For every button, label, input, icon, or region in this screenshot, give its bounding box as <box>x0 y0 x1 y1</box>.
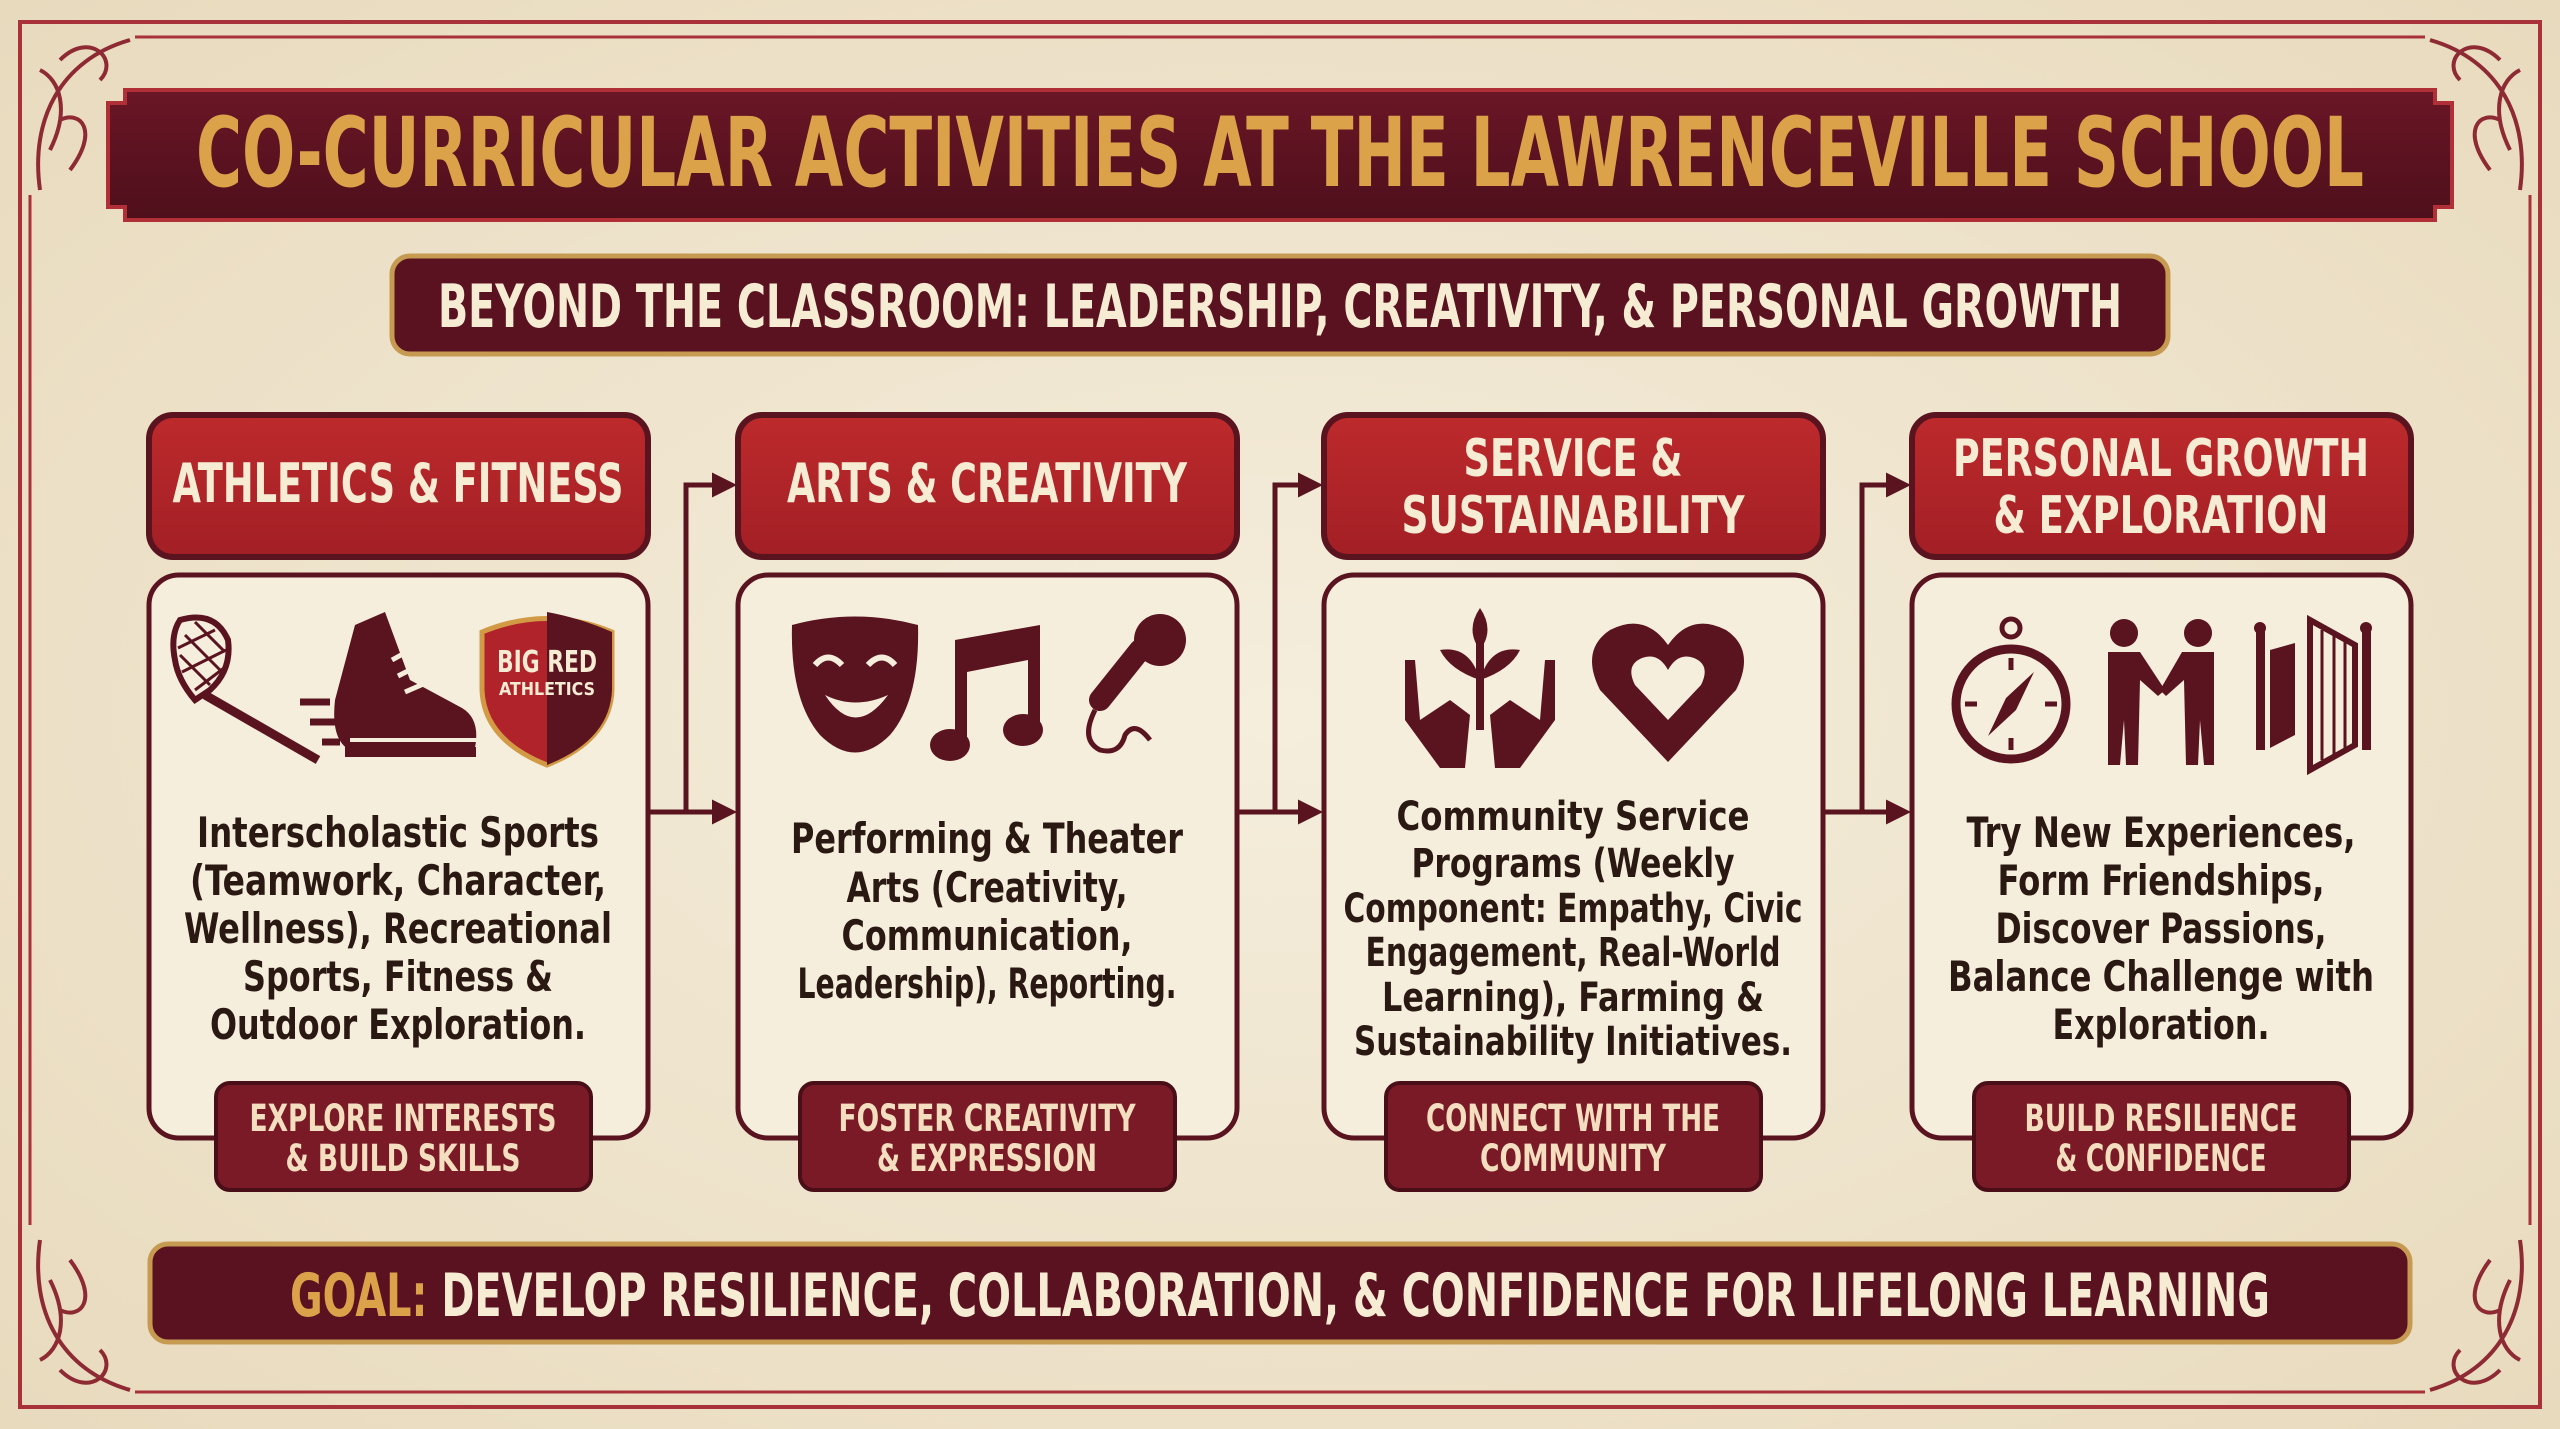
arrows between columns <box>648 485 1906 812</box>
icon: open gate <box>2254 620 2372 770</box>
header: athletics: ATHLETICS & FITNESS <box>172 452 624 515</box>
tag: connect with community: COMMUNITY <box>1480 1137 1667 1180</box>
icon: theater mask <box>792 616 918 752</box>
icon: running shoe <box>300 612 478 752</box>
header: service <box>1324 415 1823 557</box>
panel: athletics <box>149 575 648 1138</box>
text: arts description: Arts (Creativity, <box>846 863 1128 912</box>
icon: heart <box>1592 624 1744 762</box>
tag: connect with community: CONNECT WITH THE <box>1426 1097 1720 1140</box>
text: service description: Community Service <box>1396 794 1750 840</box>
text: service description: Engagement, Real-World <box>1366 930 1780 976</box>
header: personal growth <box>1912 415 2411 557</box>
text: service description: Programs (Weekly <box>1412 841 1734 887</box>
text: growth description: Try New Experiences, <box>1966 808 2356 857</box>
tag: build resilience: & CONFIDENCE <box>2056 1137 2266 1180</box>
panel: arts <box>738 575 1237 1138</box>
header: personal growth: PERSONAL GROWTH <box>1953 429 2369 489</box>
tag: connect with community <box>1386 1083 1761 1190</box>
icon: big red athletics shield: ATHLETICS <box>499 679 595 700</box>
panel: personal growth <box>1912 575 2411 1138</box>
tag: foster creativity: FOSTER CREATIVITY <box>838 1097 1136 1140</box>
text: service description: Learning), Farming & <box>1382 975 1764 1021</box>
icon: hands with plant <box>1405 608 1555 768</box>
text: growth description: Balance Challenge with <box>1948 952 2374 1001</box>
tag: explore interests <box>216 1083 591 1190</box>
text: growth description <box>1948 808 2374 1049</box>
header: athletics <box>149 415 648 557</box>
icon: big red athletics shield: BIG RED <box>497 645 597 680</box>
header: arts <box>738 415 1237 557</box>
icon: music note <box>930 625 1043 761</box>
text: arts description: Communication, <box>842 911 1132 960</box>
text: growth description: Exploration. <box>2052 1000 2270 1049</box>
tag: explore interests: & BUILD SKILLS <box>286 1137 520 1180</box>
text: athletics description: Interscholastic Sports <box>197 808 599 857</box>
text: athletics description: (Teamwork, Character, <box>190 856 606 905</box>
text: athletics description: Outdoor Exploration. <box>210 1000 586 1049</box>
tag: foster creativity: & EXPRESSION <box>877 1137 1097 1180</box>
text: arts description <box>791 814 1183 1008</box>
tag: build resilience: BUILD RESILIENCE <box>2024 1097 2298 1140</box>
tag: build resilience <box>1974 1083 2349 1190</box>
text: service description <box>1344 794 1802 1065</box>
column 4: personal growth <box>1912 415 2411 1190</box>
tag: explore interests: EXPLORE INTERESTS <box>250 1097 556 1140</box>
panel: service <box>1324 575 1823 1138</box>
header: personal growth: & EXPLORATION <box>1994 486 2328 546</box>
column 2: arts <box>738 415 1237 1190</box>
tag: foster creativity <box>800 1083 1175 1190</box>
text: service description: Sustainability Initiatives. <box>1354 1019 1792 1065</box>
icon: compass <box>1956 619 2066 759</box>
header: service: SUSTAINABILITY <box>1402 486 1745 546</box>
icon: lacrosse stick <box>173 618 318 760</box>
text: arts description: Performing & Theater <box>791 814 1183 863</box>
icon: two people shaking hands <box>2108 619 2214 765</box>
subtitle <box>392 256 2168 354</box>
text: athletics description <box>184 808 612 1049</box>
header: arts: ARTS & CREATIVITY <box>787 452 1188 515</box>
header: service: SERVICE & <box>1464 429 1682 489</box>
icon: microphone <box>1089 614 1186 751</box>
icon: big red athletics shield <box>482 612 612 765</box>
text: growth description: Form Friendships, <box>1998 856 2324 905</box>
text: athletics description: Wellness), Recreational <box>184 904 612 953</box>
text: service description: Component: Empathy, Civic <box>1344 886 1802 932</box>
column 3: service <box>1324 415 1823 1190</box>
goal bar <box>150 1244 2410 1342</box>
text: growth description: Discover Passions, <box>1996 904 2326 953</box>
text: arts description: Leadership), Reporting. <box>798 959 1176 1008</box>
text: athletics description: Sports, Fitness & <box>243 952 553 1001</box>
column 1: athletics <box>149 415 648 1190</box>
